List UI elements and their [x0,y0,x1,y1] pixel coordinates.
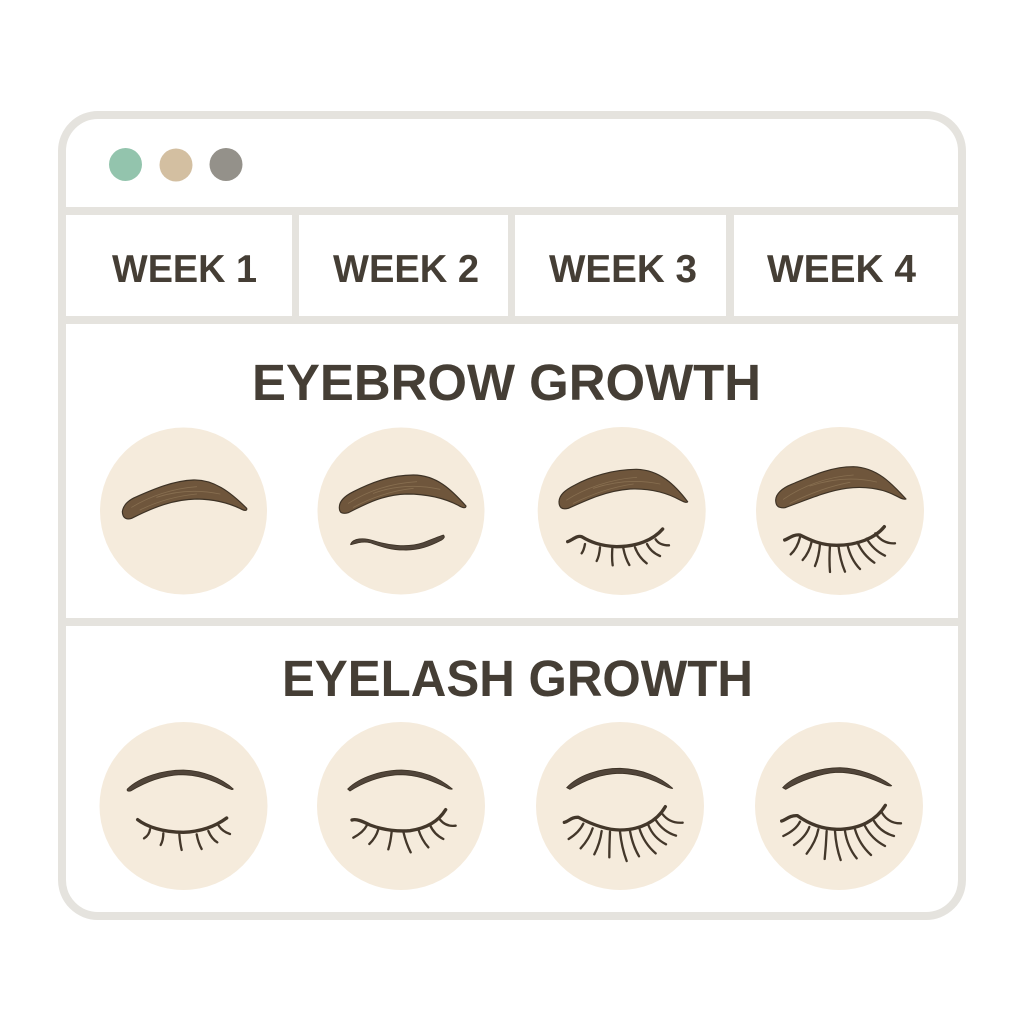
eyebrow week 1 [100,428,267,594]
eyelash week 1 [100,722,268,890]
eyebrow week 2 [318,428,484,594]
heading: eyebrow growth: EYEBROW GROWTH [252,354,761,411]
week header labels: WEEK 3 [549,248,697,291]
eyebrow row circles and art [100,427,924,595]
week header labels [112,248,916,291]
eyelash week 4 [755,722,923,890]
window frame [62,115,962,916]
table grid lines [62,207,962,626]
week header labels: WEEK 1 [112,248,257,291]
eyebrow week 4 [756,427,924,595]
heading: eyelash growth: EYELASH GROWTH [282,650,753,707]
eyebrow week 3 [538,427,706,595]
window dots [109,148,242,182]
eyelash week 3 [536,722,704,890]
eyelash week 2 [317,722,485,890]
eyelash row circles and art [100,722,923,890]
week header labels: WEEK 4 [767,248,916,291]
week header labels: WEEK 2 [333,248,479,291]
